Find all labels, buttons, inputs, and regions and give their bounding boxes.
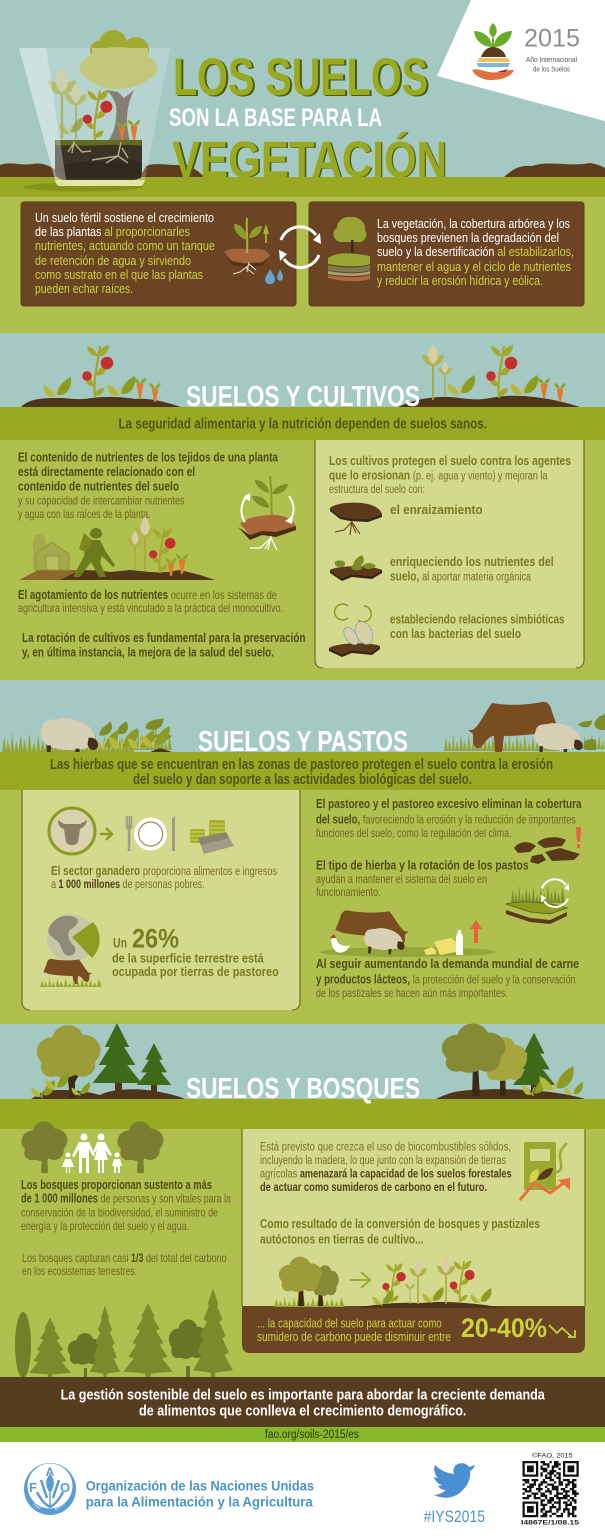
logo: FAO: F — [29, 1480, 37, 1495]
heading: Suelos y pastos: SUELOS Y PASTOS — [198, 726, 408, 758]
band: crops — [0, 407, 605, 440]
icon: circular arrows — [279, 227, 321, 268]
illustration: livestock and dairy demand — [320, 910, 496, 957]
QR code block: ©FAO, 2015 — [532, 1452, 573, 1460]
text block: crop rotation — [22, 630, 306, 660]
soil mounds in header — [0, 163, 605, 177]
text block: grass type: funcionamiento. — [316, 885, 381, 899]
panel: livestock — [22, 790, 300, 1010]
text: biofuels: incluyendo la madera, lo que junto con la expansión de tierras — [260, 1153, 506, 1167]
icon: soil with roots — [330, 503, 382, 535]
main title: LOS SUELOS — [173, 48, 428, 107]
text block: crop rotation: La rotación de cultivos es fundamental para la preservación — [22, 630, 306, 645]
text: crops protect: el enraizamiento — [390, 502, 483, 517]
band: forests — [0, 1099, 605, 1129]
logo: FAO — [24, 1463, 76, 1515]
text: crops protect: estructura del suelo con: — [329, 484, 425, 496]
icon: coins and money — [190, 820, 234, 854]
logo: FAO: A — [46, 1465, 54, 1479]
text: biofuels — [260, 1140, 512, 1194]
panel: fertile soil text: como sustrato en el que las plantas — [35, 267, 203, 282]
text block: forests sustain: de 1 000 millones de personas y son vitales para la — [21, 1192, 231, 1206]
text: livestock sector — [51, 864, 277, 891]
panel: vegetation text: y reducir la erosión hídrica y eólica. — [377, 273, 543, 288]
footer: sustainable management banner — [0, 1377, 605, 1427]
panel: vegetation text: mantener el agua y el ciclo de nutrientes — [377, 259, 571, 274]
text block: nutrient content: está directamente relacionado con el — [18, 465, 195, 479]
text: 26 percent: Un — [113, 935, 127, 951]
panel: vegetation text: La vegetación, la cobertura arbórea y los — [377, 216, 570, 231]
logo: 2015 International Year of Soils: 2015 — [524, 25, 580, 53]
text: livestock sector: a 1 000 millones de personas pobres. — [51, 879, 205, 891]
icon: tree on soil layers — [328, 217, 370, 281]
icon: falling arrow — [549, 1325, 575, 1337]
illustration: farmer spraying crops — [19, 517, 215, 580]
main title: SON LA BASE PARA LA — [169, 104, 382, 132]
panel: fertile soil text: pueden echar raíces. — [35, 281, 133, 296]
panel: fertile soil text: de retención de agua y sirviendo — [35, 253, 191, 268]
text block: carbon capture: Los bosques capturan casi 1/3 del total del carbono — [22, 1251, 227, 1265]
text: crops protect: enriqueciendo los nutrientes del — [390, 554, 554, 569]
icon: cracked soil with exclamation — [514, 827, 581, 864]
text: land conversion — [260, 1216, 540, 1246]
main title — [169, 48, 448, 188]
text: 26 percent: de la superficie terrestre está — [112, 951, 264, 966]
white logo corner — [437, 0, 605, 121]
footer: sustainable management banner: de alimentos que conlleva el crecimiento demográfico. — [139, 1403, 466, 1419]
panel: fertile soil text: nutrientes, actuando como un tanque — [35, 238, 215, 253]
band: pastures — [0, 752, 605, 790]
text block: grass type — [316, 858, 529, 899]
panel: crops protect soil — [315, 440, 584, 668]
illustration: tree line — [15, 1288, 233, 1378]
text block: nutrient content: El contenido de nutrientes de los tejidos de una planta — [18, 451, 279, 465]
text: biofuels: Está previsto que crezca el uso de biocombustibles sólidos, — [260, 1140, 511, 1154]
text block: overgrazing: funciones del suelo, como la regulación del clima. — [316, 826, 512, 840]
text: biofuels: de actuar como sumideros de carbono en el futuro. — [260, 1180, 487, 1194]
logo: 2015 International Year of Soils: Año Internacional — [526, 55, 577, 64]
text: 26 percent — [112, 924, 279, 979]
statistic: 20-40 percent: 20-40% — [461, 1313, 547, 1343]
icon: plant with nutrient cycle arrows — [238, 476, 296, 550]
text: 26 percent: ocupada por tierras de pastoreo — [112, 964, 279, 979]
text block: forests sustain: conservación de la biodiversidad, el suministro de — [21, 1206, 218, 1220]
text block: nutrient content: contenido de nutrientes del suelo — [18, 480, 179, 494]
text: 26 percent: 26% — [132, 924, 179, 954]
main title: VEGETACIÓN — [174, 132, 448, 188]
logo: 2015 International Year of Soils — [472, 23, 580, 80]
panel: vegetation text: bosques previenen la degradación del — [377, 230, 559, 245]
text block: crop rotation: y, en última instancia, la mejora de la salud del suelo. — [22, 645, 274, 660]
footer: white area — [0, 1442, 605, 1536]
section: forest left — [31, 1023, 185, 1099]
text block: nutrient content: y agua con las raíces de la planta. — [18, 507, 151, 521]
arrow: to food — [100, 828, 112, 840]
text: crops protect — [329, 453, 571, 641]
text block: rising demand: de los pastizales se hacen aún más importantes. — [316, 986, 508, 1000]
text block: forests sustain: energía y la protección del suelo y el agua. — [21, 1219, 189, 1233]
text block: forests sustain — [21, 1178, 231, 1233]
illustration: trees to crops — [274, 1256, 506, 1308]
text: capacity decline: ... la capacidad del suelo para actuar como — [257, 1317, 442, 1331]
panel: fertile soil text: Un suelo fértil sostiene el crecimiento — [35, 210, 214, 225]
icon: cow in circle — [49, 808, 95, 854]
text block: forests sustain: Los bosques proporcionan sustento a más — [21, 1178, 212, 1192]
text block: carbon capture: en los ecosistemas terrestres. — [22, 1264, 137, 1278]
footer: sustainable management banner: La gestión sostenible del suelo es importante para abordar la creciente demanda — [61, 1387, 546, 1403]
section: grazing left — [2, 718, 172, 756]
panel: fertile soil text — [21, 202, 296, 306]
heading: Suelos y cultivos: SUELOS Y CULTIVOS — [186, 381, 420, 413]
text: livestock sector: El sector ganadero proporciona alimentos e ingresos — [51, 864, 277, 878]
illustration: plant pot terrarium with tree — [19, 30, 170, 192]
icon: symbiotic bacteria — [329, 604, 380, 657]
subheading: grasses: del suelo y dan soporte a las actividades biológicas del suelo. — [133, 772, 472, 788]
panel: biofuels and land conversion — [242, 1129, 585, 1353]
panel: fertile soil text: de las plantas al proporcionarles — [35, 224, 190, 239]
section: crop plants left — [21, 345, 181, 407]
section: crop plants right — [398, 344, 580, 407]
main title: LOS SUELOS — [175, 49, 430, 108]
text block: nutrient depletion — [18, 588, 283, 615]
text: capacity decline: sumidero de carbono puede disminuir entre — [257, 1330, 451, 1344]
icon: fuel pump with rising arrow — [520, 1142, 570, 1200]
subheading: grasses — [50, 757, 553, 788]
chart: globe with 26 percent slice — [40, 914, 102, 987]
text block: nutrient depletion: El agotamiento de los nutrientes ocurre en los sistemas de — [18, 588, 277, 602]
QR code block: I4867E/1/08.15 — [521, 1520, 579, 1527]
main title: VEGETACIÓN — [172, 131, 447, 188]
icon: soil with leaves — [330, 555, 382, 581]
icon: grass rotation on soil — [506, 879, 569, 924]
logo: FAO: FIAT — [32, 1502, 42, 1511]
text block: nutrient depletion: agricultura intensiva y está vinculado a la práctica del monocultivo. — [18, 601, 283, 615]
section: forest right — [436, 1024, 585, 1099]
text block: rising demand — [316, 956, 579, 1000]
subheading: food security: La seguridad alimentaria y la nutrición dependen de suelos sanos. — [118, 417, 487, 433]
footer: url bar: fao.org/soils-2015/es — [265, 1429, 359, 1441]
text block: carbon capture — [22, 1251, 227, 1278]
text block: grass type: El tipo de hierba y la rotación de los pastos — [316, 858, 529, 873]
heading: Suelos y bosques: SUELOS Y BOSQUES — [186, 1073, 420, 1105]
footer: url bar — [0, 1427, 605, 1442]
logo: 2015 International Year of Soils: de los Suelos — [533, 64, 570, 74]
text block: grass type: ayudan a mantener el sistema del suelo en — [316, 872, 487, 886]
QR code block — [521, 1452, 579, 1527]
text: FAO name: Organización de las Naciones Unidas — [86, 1478, 314, 1494]
text block: nutrient content: y su capacidad de intercambiar nutrientes — [18, 494, 184, 508]
icon: family between trees — [21, 1121, 163, 1173]
section: grazing right — [444, 702, 605, 756]
icon: plant with water drops — [224, 218, 283, 284]
header band — [0, 177, 605, 197]
logo: FAO: O — [60, 1480, 70, 1495]
icon: twitter bird — [434, 1463, 475, 1498]
panel: vegetation text — [309, 202, 584, 306]
icon: plate with fork and knife — [126, 816, 175, 851]
panel: vegetation text: suelo y la desertificación al estabilizarlos, — [377, 244, 574, 259]
text: hashtag: #IYS2015 — [424, 1507, 485, 1526]
text block: overgrazing — [316, 796, 582, 840]
logo: FAO: PANIS — [54, 1500, 66, 1512]
text: FAO name: para la Alimentación y la Agricultura — [86, 1494, 313, 1510]
text: land conversion: autóctonos en tierras de cultivo... — [260, 1231, 424, 1246]
text: crops protect: suelo, al aportar materia orgánica — [390, 569, 531, 584]
text: biofuels: agrícolas amenazará la capacidad de los suelos forestales — [260, 1167, 512, 1181]
text: crops protect: que lo erosionan (p. ej. agua y viento) y mejoran la — [329, 467, 548, 482]
text block: nutrient content — [18, 451, 279, 521]
text: FAO name — [86, 1478, 314, 1510]
text: capacity decline — [257, 1317, 451, 1344]
text: crops protect: con las bacterias del suelo — [390, 626, 521, 641]
